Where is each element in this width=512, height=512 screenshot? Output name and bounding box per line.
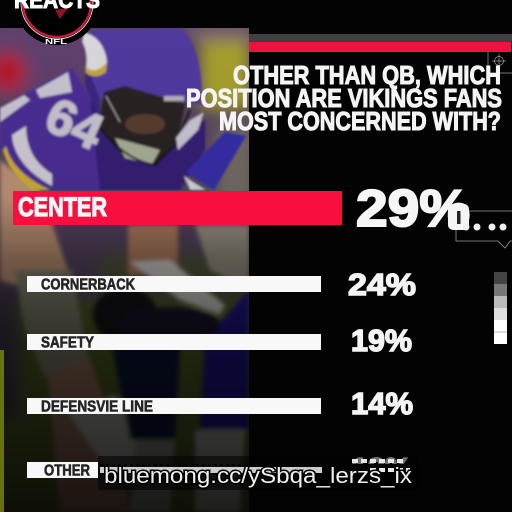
result: defensive line: 14% — [351, 386, 413, 421]
decorative crosshair — [488, 52, 512, 73]
watermark overlay — [98, 456, 420, 490]
jersey 64: 64 — [38, 87, 112, 161]
top result: center: 29% — [356, 180, 470, 238]
helmet shell — [86, 28, 202, 105]
top result: center — [13, 180, 470, 238]
result: defensive line: DEFENSVIE LINE — [41, 398, 153, 416]
decorative grey scale legend — [494, 272, 507, 344]
logo badge — [14, 0, 100, 46]
decorative chat bubble — [448, 204, 512, 248]
arm and skin — [0, 160, 249, 512]
result: cornerback — [27, 267, 416, 302]
top result: center: CENTER — [18, 192, 107, 222]
player photo — [0, 20, 260, 512]
title — [186, 60, 502, 136]
result: other — [27, 451, 412, 486]
watermark overlay: bluemong.cc/ySbqa_lerzs_ix — [104, 463, 412, 488]
helmet horn — [82, 32, 107, 73]
shoulder stripes — [3, 146, 50, 190]
sleeve right — [186, 132, 246, 190]
logo badge: NFL — [45, 39, 68, 46]
result: defensive line — [27, 386, 413, 421]
result: safety: SAFETY — [41, 334, 95, 352]
watermark overlay: bluemong.cc/ySbqa_lerzs_ix — [104, 463, 412, 488]
face and mask — [98, 86, 185, 165]
result: safety: 19% — [351, 323, 412, 358]
jersey — [0, 68, 110, 190]
result: cornerback: 24% — [348, 267, 416, 302]
result: safety — [27, 323, 412, 358]
result: other: 13% — [351, 451, 412, 486]
lower fade — [0, 28, 249, 512]
right sleeve number — [176, 112, 204, 150]
result: other: OTHER — [44, 462, 90, 480]
field edge strip — [0, 350, 4, 512]
header stripes — [249, 34, 512, 52]
result: cornerback: CORNERBACK — [41, 276, 136, 294]
